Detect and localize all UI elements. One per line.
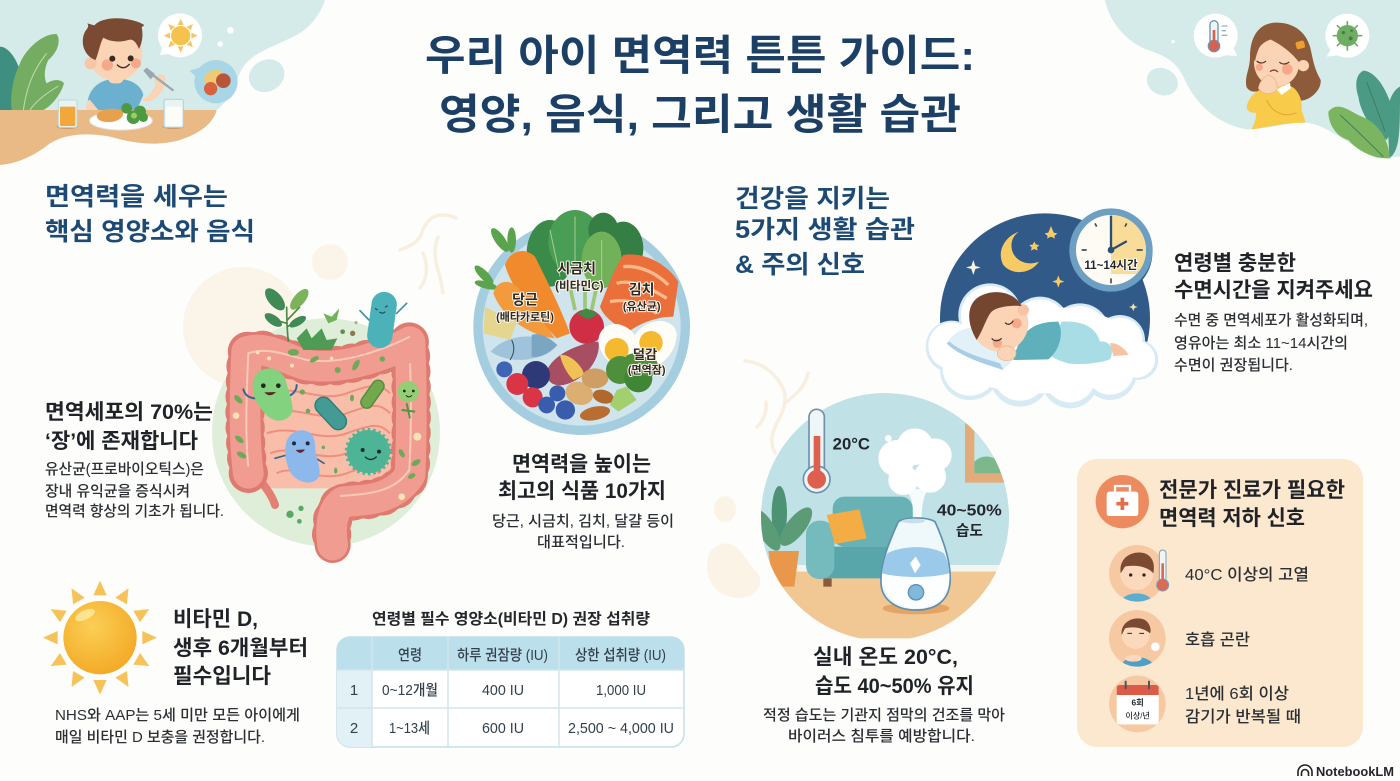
broccoli xyxy=(606,353,658,412)
oval blob xyxy=(243,53,290,98)
row 2 xyxy=(350,720,674,737)
nuts xyxy=(562,368,615,423)
berries xyxy=(496,361,575,420)
heading: lifestyle section: 건강을 지키는 xyxy=(735,185,890,213)
heading: lifestyle section: 5가지 생활 습관 xyxy=(735,216,915,244)
text block: vitamin D: 비타민 D, xyxy=(173,608,258,631)
text block: sleep: 수면시간을 지켜주세요 xyxy=(1174,279,1373,302)
row 1: 0~12개월 xyxy=(382,682,438,699)
rod bacteria xyxy=(312,378,386,433)
cold frequency label: 1년에 6회 이상 xyxy=(1185,685,1289,703)
spinach xyxy=(527,210,643,310)
heading: nutrients section: 면역력을 세우는 xyxy=(45,183,228,211)
row 1: 400 IU xyxy=(482,682,524,699)
NotebookLM logo: NotebookLM xyxy=(1316,764,1394,779)
decorative beige background shapes xyxy=(183,215,808,598)
text block: gut immunity: 면역세포의 70%는 xyxy=(45,401,213,424)
icon: fever xyxy=(1109,545,1169,603)
milk glass xyxy=(163,99,184,129)
sofa xyxy=(806,497,913,587)
illustration: room with humidifier xyxy=(761,393,1009,638)
panel: warning signs: 면역력 저하 신호 xyxy=(1159,507,1305,530)
fish xyxy=(491,334,557,360)
teal bacterium xyxy=(360,290,407,350)
tomato xyxy=(569,308,604,344)
leaves xyxy=(1328,71,1400,158)
moon and stars xyxy=(966,226,1138,311)
fuzzy bacterium xyxy=(347,430,390,473)
table header row xyxy=(337,637,684,670)
clock: 11~14시간 xyxy=(1084,258,1138,272)
card heading: 전문가 진료가 필요한 xyxy=(1159,479,1345,502)
food labels: 덜감 xyxy=(633,347,657,362)
row 1: 1 xyxy=(350,682,358,699)
text block: top 10 foods xyxy=(492,453,674,551)
food labels: (유산균) xyxy=(623,299,661,313)
text block: sleep: 영유아는 최소 11~14시간의 xyxy=(1174,335,1348,352)
title xyxy=(425,32,975,138)
panel: warning signs xyxy=(1077,459,1363,747)
text block: sleep xyxy=(1174,252,1373,374)
text block: indoor environment: 바이러스 침투를 예방합니다. xyxy=(788,728,975,745)
potted plant xyxy=(761,486,812,587)
plant sprout xyxy=(261,285,358,350)
row 2: 2 xyxy=(350,720,358,737)
text block: sleep: 연령별 충분한 xyxy=(1174,252,1296,275)
blue bean bacterium xyxy=(275,430,324,483)
background blob right xyxy=(1105,0,1400,158)
text block: gut immunity: 장내 유익균을 증식시켜 xyxy=(45,483,190,500)
heading: nutrients section xyxy=(45,183,255,246)
text block: sleep: 수면 중 면역세포가 활성화되며, xyxy=(1174,312,1368,329)
title: 영양, 음식, 그리고 생활 습관 xyxy=(439,91,961,138)
humidity label: 40~50% xyxy=(937,502,1002,519)
child xyxy=(947,292,1128,370)
breathing label: 호흡 곤란 xyxy=(1185,631,1250,649)
banana chips xyxy=(483,307,517,340)
thermometer bubble xyxy=(1194,14,1238,58)
row 1 xyxy=(350,682,646,699)
wall xyxy=(750,390,1020,620)
table body xyxy=(337,637,684,747)
text block: gut immunity xyxy=(45,401,224,520)
text block: gut immunity: 유산균(프로바이오틱스)은 xyxy=(45,461,204,478)
eggs xyxy=(598,321,677,367)
background blob left xyxy=(0,0,325,110)
food labels: (면역잠) xyxy=(628,363,666,376)
heading: nutrients section: 핵심 영양소와 음식 xyxy=(45,218,255,246)
icon: medical kit xyxy=(1096,475,1149,528)
text block: vitamin D xyxy=(55,608,308,746)
heading: lifestyle section xyxy=(735,185,915,279)
sweet potato xyxy=(546,342,599,385)
illustration: intestine with friendly bacteria xyxy=(212,285,440,546)
text block: top 10 foods: 면역력을 높이는 xyxy=(512,453,651,476)
row 2: 1~13세 xyxy=(389,720,430,737)
icon: calendar: 이상/년 xyxy=(1126,710,1150,720)
header labels: 연령 xyxy=(398,647,422,664)
text block: vitamin D: 매일 비타민 D 보충을 권정합니다. xyxy=(55,729,265,746)
card background xyxy=(1077,459,1363,747)
text block: vitamin D: 생후 6개월부터 xyxy=(173,637,308,660)
header labels xyxy=(398,647,666,664)
floor xyxy=(774,572,996,638)
picture frame xyxy=(965,423,1004,483)
first column xyxy=(337,670,372,747)
humidifier xyxy=(881,518,950,614)
carrots xyxy=(472,226,570,338)
food labels: 김치 xyxy=(629,281,655,297)
food labels: 당근 xyxy=(512,291,538,307)
green bean bacterium xyxy=(243,368,297,421)
table title: 연령별 필수 영양소(비타민 D) 권장 섭취량 xyxy=(372,610,650,628)
cloud outline xyxy=(926,283,1158,408)
text block: vitamin D: 필수입니다 xyxy=(173,665,271,688)
text block: gut immunity: ‘장’에 존재합니다 xyxy=(45,430,198,453)
night sky xyxy=(940,213,1150,342)
humidifier steam xyxy=(878,428,952,518)
text block: sleep: 수면이 권장됩니다. xyxy=(1174,357,1293,374)
panel: warning signs: 감기가 반복될 때 xyxy=(1185,708,1301,726)
virus bubble xyxy=(1325,14,1369,58)
small intestine xyxy=(258,368,395,488)
text block: indoor environment: 적정 습도는 기관지 점막의 건조를 막아 xyxy=(763,707,1005,724)
clock xyxy=(1069,208,1153,294)
leaves xyxy=(0,34,64,110)
text block: top 10 foods: 대표적입니다. xyxy=(537,534,625,551)
illustration: plate of immune foods xyxy=(472,210,690,435)
oval blob xyxy=(1142,63,1182,101)
text block: indoor environment: 습도 40~50% 유지 xyxy=(815,675,974,698)
girl xyxy=(1246,23,1321,129)
humidity label xyxy=(937,502,1002,540)
heading: lifestyle section: & 주의 신호 xyxy=(735,251,865,279)
food labels: 시금치 xyxy=(557,260,596,276)
text block: top 10 foods: 당근, 시금치, 김치, 달걀 등이 xyxy=(492,513,674,530)
icon: sun xyxy=(43,581,157,695)
green circle backdrop xyxy=(212,318,440,546)
row 2: 600 IU xyxy=(482,720,524,737)
text block: indoor environment xyxy=(763,646,1005,745)
text block: indoor environment: 실내 온도 20°C, xyxy=(813,646,958,669)
plate xyxy=(473,218,690,435)
gut flecks xyxy=(233,349,422,480)
juice glass xyxy=(57,100,78,129)
food labels: (비타민C) xyxy=(555,280,604,293)
cloud xyxy=(928,286,1155,402)
boy xyxy=(83,18,173,110)
title: 우리 아이 면역력 튼튼 가이드: xyxy=(425,32,975,79)
food labels xyxy=(496,260,666,376)
row 2: 2,500 ~ 4,000 IU xyxy=(568,720,674,737)
kimchi xyxy=(600,254,678,332)
text block: top 10 foods: 최고의 식품 10가지 xyxy=(498,480,666,503)
food thought bubble xyxy=(189,60,238,103)
plate with food xyxy=(90,103,152,130)
small green bacterium xyxy=(398,381,419,418)
illustration: sleeping child on cloud xyxy=(926,208,1158,423)
large intestine xyxy=(245,337,411,545)
food labels: (배타카로틴) xyxy=(496,310,554,324)
header labels: 하루 권잠량 (IU) xyxy=(457,647,548,664)
icon: calendar xyxy=(1109,676,1166,732)
icon: breathing difficulty xyxy=(1109,610,1166,668)
temperature label: 20°C xyxy=(833,434,870,453)
text block: gut immunity: 면역력 향상의 기초가 됩니다. xyxy=(45,503,224,520)
fever label: 40°C 이상의 고열 xyxy=(1185,566,1309,584)
header labels: 상한 섭취량 (IU) xyxy=(575,647,666,664)
table: vitamin D intake xyxy=(337,610,684,747)
humidity label: 습도 xyxy=(956,523,983,540)
illustration: sick girl xyxy=(1105,0,1400,158)
row 1: 1,000 IU xyxy=(596,682,646,699)
text block: vitamin D: NHS와 AAP는 5세 미만 모든 아이에게 xyxy=(55,707,300,724)
sun thought bubble xyxy=(158,13,234,57)
table xyxy=(0,110,217,165)
thermometer xyxy=(803,409,830,493)
illustration: boy eating at table xyxy=(0,0,325,165)
icon: calendar: 6회 xyxy=(1132,698,1144,708)
